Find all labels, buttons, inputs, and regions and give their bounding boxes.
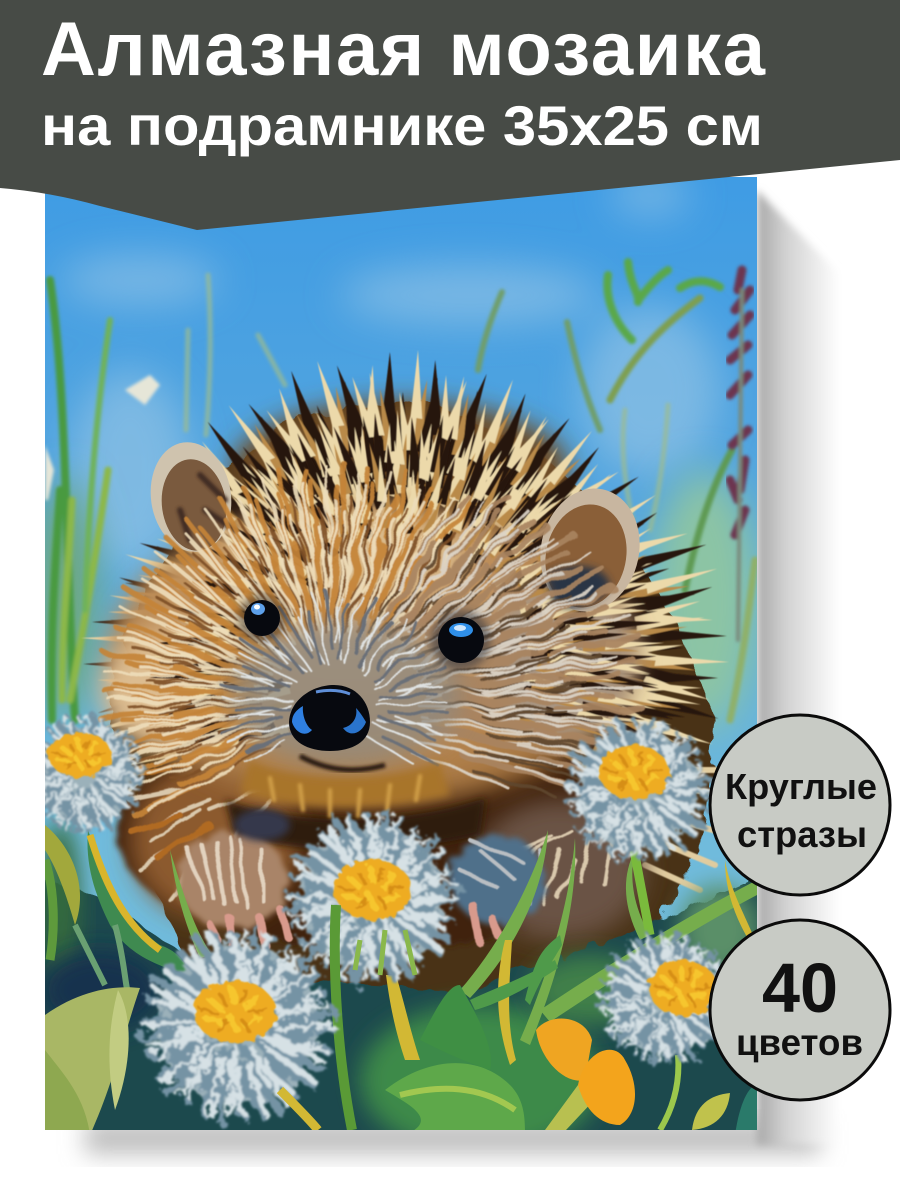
canvas shadow (85, 190, 840, 1154)
left striped leaf (87, 830, 190, 975)
dandelion lower right (595, 931, 735, 1065)
badge: 40 colours: цветов (736, 1022, 863, 1063)
leaves (45, 987, 140, 1135)
badge: 40 colours: 40 (762, 949, 838, 1027)
background grass (50, 262, 755, 720)
title: Алмазная мозаика (41, 7, 766, 92)
dandelion lower left (137, 928, 339, 1130)
face fur strokes (95, 462, 646, 817)
body lower fur (110, 757, 662, 950)
hedgehog (81, 331, 751, 990)
icon: eyes (238, 594, 491, 670)
sky brush clouds (60, 175, 720, 570)
foreground grass blades (170, 830, 757, 1045)
icon: left ear (150, 442, 240, 552)
foreground meadow (45, 814, 757, 1130)
lower right spines (642, 766, 718, 894)
dandelion centre (281, 811, 463, 1130)
sky background (45, 177, 757, 952)
spine coat (81, 331, 751, 990)
icon: nose (289, 685, 385, 770)
badge: 40 colours (710, 920, 890, 1100)
header banner (0, 0, 900, 230)
muzzle (219, 588, 460, 772)
icon: right ear (540, 488, 640, 614)
icon: paws (176, 809, 546, 948)
purple grass spike (730, 270, 750, 640)
painting: hedgehog among dandelions (24, 175, 775, 1170)
orange flower (536, 1019, 635, 1130)
badge: round rhinestones: стразы (737, 814, 867, 855)
subtitle: на подрамнике 35х25 см (41, 94, 763, 157)
white petals (45, 375, 160, 500)
badge: round rhinestones (710, 715, 890, 895)
badge: round rhinestones: Круглые (725, 766, 877, 807)
chin fur (225, 760, 485, 850)
inner spines blending into face (149, 410, 664, 750)
dandelion left (45, 710, 149, 835)
dandelion right (562, 717, 714, 935)
face (100, 505, 635, 805)
background grass tint (35, 470, 760, 730)
